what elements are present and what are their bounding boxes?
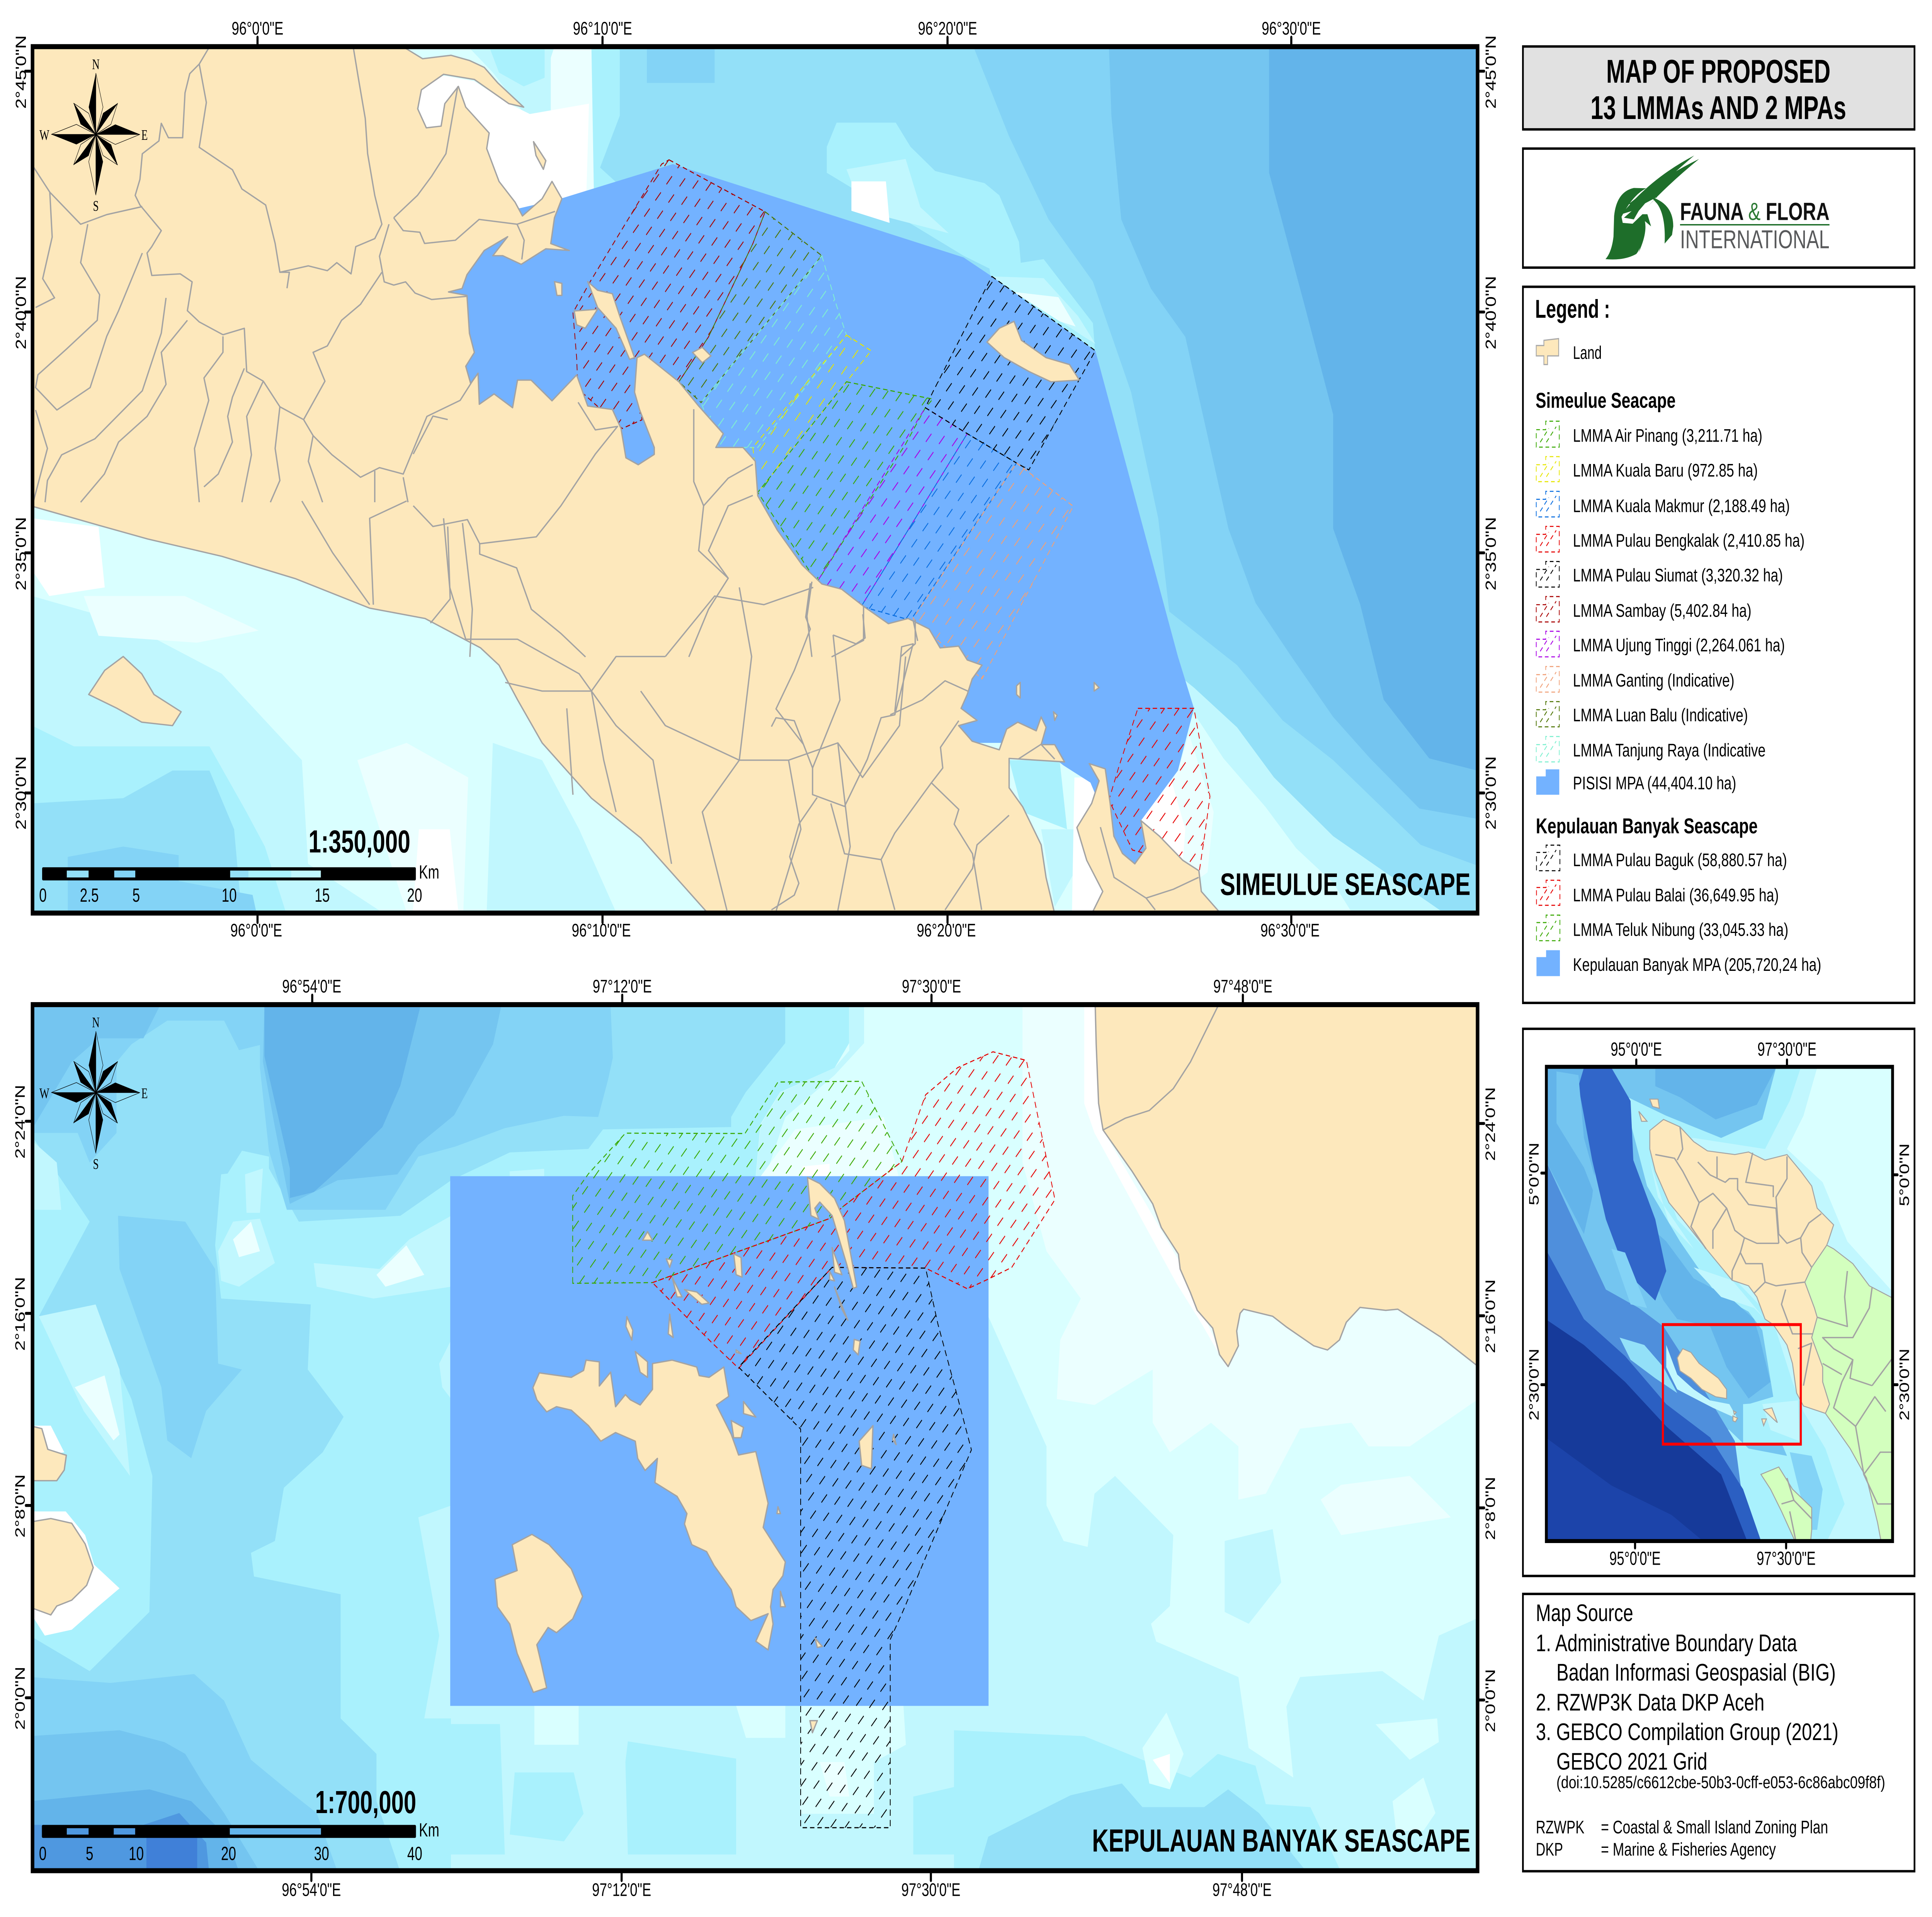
graticule ticks and labels: Kepulauan Banyak: 96°54'0"E: [282, 976, 341, 996]
LMMA Sambay: [573, 160, 765, 428]
land: Simeulue mainland: [32, 47, 1221, 914]
legend item: Ganting: LMMA Ganting (Indicative): [1573, 670, 1735, 690]
inset graticule labels: [1527, 1039, 1912, 1569]
legend item: Air Pinang: LMMA Air Pinang (3,211.71 ha): [1573, 425, 1762, 446]
scale bar: Kepulauan Banyak: 10: [129, 1843, 144, 1864]
graticule ticks and labels: Kepulauan Banyak: 2°8'0"N: [1483, 1477, 1498, 1540]
graticule ticks and labels: Simeulue: 96°30'0"E: [1262, 18, 1321, 39]
scale bar: Simeulue: [39, 862, 439, 906]
inset bathymetry and land: [1546, 1066, 1894, 1545]
legend item: Tanjung Raya: LMMA Tanjung Raya (Indicative: [1573, 740, 1765, 761]
source list: Map Source: [1536, 1599, 1633, 1626]
source list: 2. RZWP3K Data DKP Aceh: [1536, 1689, 1764, 1716]
legend item: Pulau Siumat: [1536, 561, 1783, 587]
abbreviations: RZWPK: [1536, 1817, 1584, 1837]
abbreviations: = Coastal & Small Island Zoning Plan: [1601, 1817, 1828, 1837]
LMMA Kuala Makmur: [861, 433, 1017, 620]
legend item: Kepulauan Banyak MPA: [1536, 950, 1821, 976]
scale bar: Simeulue: 5: [133, 885, 140, 906]
scale bar: Simeulue: 10: [222, 885, 237, 906]
bathymetry background: Kepulauan Banyak: [30, 1003, 1478, 1878]
LMMA Air Pinang: [758, 382, 933, 582]
legend item: Kuala Baru: [1536, 457, 1758, 482]
graticule ticks and labels: Simeulue: 2°45'0"N: [1483, 35, 1499, 109]
legend item: Pulau Baguk: [1536, 845, 1787, 871]
scale bar: Simeulue: 15: [315, 885, 330, 906]
legend subheading: Kepulauan Banyak Seascape: Kepulauan Banyak Seascape: [1536, 814, 1758, 838]
panel: Simeulue seascape map: [12, 18, 1499, 940]
logo wordmark: [1680, 197, 1830, 254]
panel: map source: [1523, 1594, 1915, 1871]
scale bar: Simeulue: 0: [39, 885, 47, 906]
inset graticule labels: 2°30'0"N: [1527, 1349, 1542, 1421]
inset extent: red rectangle: [1663, 1325, 1801, 1444]
scale bar: Kepulauan Banyak: 40: [407, 1843, 422, 1864]
legend item: Kepulauan Banyak MPA: Kepulauan Banyak MPA (205,720,24 ha): [1573, 955, 1821, 975]
graticule ticks and labels: Kepulauan Banyak: 97°30'0"E: [902, 976, 961, 996]
abbreviations: [1536, 1817, 1828, 1860]
inset graticule labels: 2°30'0"N: [1897, 1349, 1912, 1421]
land: Kepulauan Banyak islands and mainland: [30, 1003, 1478, 1733]
LMMA Kuala Baru: [753, 335, 871, 492]
scale bar: Kepulauan Banyak: 5: [86, 1843, 94, 1864]
legend heading: Legend :: [1535, 295, 1610, 323]
panel: legend: [1523, 287, 1915, 1003]
icon: Fauna and Flora oryx leaf logo: [1605, 155, 1699, 260]
graticule ticks and labels: Simeulue: 96°0'0"E: [230, 920, 282, 940]
LMMA Tanjung Raya: [701, 256, 847, 447]
graticule ticks and labels: Simeulue: 2°30'0"N: [1483, 756, 1499, 830]
compass rose: Kepulauan Banyak: [39, 1015, 148, 1173]
source list: (doi:10.5285/c6612cbe-50b3-0cff-e053-6c86abc09f8f): [1556, 1773, 1885, 1792]
inset graticule labels: 95°0'0"E: [1611, 1039, 1662, 1060]
source list: 1. Administrative Boundary Data: [1536, 1629, 1797, 1657]
graticule ticks and labels: Kepulauan Banyak: 97°48'0"E: [1213, 1880, 1272, 1900]
legend item: Pulau Bengkalak: LMMA Pulau Bengkalak (2,410.85 ha): [1573, 530, 1804, 551]
legend item: Luan Balu: [1536, 702, 1748, 727]
legend item: Teluk Nibung: LMMA Teluk Nibung (33,045.33 ha): [1573, 919, 1788, 940]
scale bar: Simeulue: 20: [407, 885, 422, 906]
graticule ticks and labels: Kepulauan Banyak: 2°0'0"N: [13, 1667, 28, 1730]
scale ratio: Simeulue: 1:350,000: [308, 824, 410, 860]
graticule ticks and labels: Kepulauan Banyak: 2°24'0"N: [1483, 1087, 1498, 1161]
Kepulauan Banyak MPA rectangle: [450, 1176, 988, 1706]
graticule ticks and labels: Simeulue: 96°0'0"E: [231, 18, 283, 39]
legend item: Kuala Baru: LMMA Kuala Baru (972.85 ha): [1573, 460, 1758, 481]
LMMA Ujung Tinggi: [817, 408, 967, 607]
graticule ticks and labels: Kepulauan Banyak: 96°54'0"E: [282, 1880, 341, 1900]
LMMA hatched areas: Kepulauan Banyak: [573, 1052, 1055, 1828]
panel: inset location map: [1523, 1029, 1915, 1576]
LMMA Pulau Baguk: [738, 1268, 971, 1828]
graticule ticks and labels: Simeulue: 2°40'0"N: [12, 276, 29, 350]
source list: [1536, 1599, 1885, 1792]
legend item: land: Land: [1573, 343, 1602, 363]
graticule ticks and labels: Simeulue: 96°10'0"E: [572, 920, 631, 940]
inset graticule labels: 97°30'0"E: [1757, 1548, 1816, 1569]
land: Aceh: [1639, 1099, 1833, 1426]
seascape name: Simeulue: SIMEULUE SEASCAPE: [1220, 867, 1470, 902]
scale bar: Simeulue: 2.5: [80, 885, 99, 906]
graticule ticks and labels: Kepulauan Banyak: 2°16'0"N: [13, 1277, 28, 1351]
legend item: Pulau Baguk: LMMA Pulau Baguk (58,880.57 ha): [1573, 850, 1787, 870]
abbreviations: = Marine & Fisheries Agency: [1601, 1839, 1776, 1860]
graticule ticks and labels: Kepulauan Banyak: 2°24'0"N: [13, 1085, 28, 1159]
legend item: Pisisi MPA: PISISI MPA (44,404.10 ha): [1573, 773, 1736, 793]
LMMA Luan Balu: [679, 212, 822, 403]
logo wordmark: FAUNA & FLORA: [1680, 197, 1830, 226]
panel: logo: [1523, 149, 1915, 268]
frame: Simeulue map: [32, 47, 1478, 913]
scale bar: Kepulauan Banyak: Km: [419, 1820, 439, 1841]
source list: Badan Informasi Geospasial (BIG): [1556, 1659, 1836, 1686]
legend item: Ganting: [1536, 666, 1735, 692]
LMMA Ganting: [913, 463, 1073, 679]
land: North Sumatra and Nias (green): [1761, 1245, 1894, 1545]
legend subheading: Simeulue Seacape: Simeulue Seacape: [1536, 389, 1675, 413]
graticule ticks and labels: Simeulue: 96°20'0"E: [917, 920, 976, 940]
LMMA hatched areas: Simeulue: [573, 160, 1210, 874]
legend item: Pulau Balai: LMMA Pulau Balai (36,649.95 ha): [1573, 885, 1779, 905]
graticule ticks and labels: Simeulue: 2°45'0"N: [12, 35, 29, 109]
source list: 3. GEBCO Compilation Group (2021): [1536, 1718, 1838, 1745]
scale bar: Kepulauan Banyak: 30: [314, 1843, 329, 1864]
legend item: Air Pinang: [1536, 421, 1762, 447]
Pisisi MPA polygon: [450, 164, 1194, 872]
graticule ticks and labels: Simeulue: [12, 18, 1499, 940]
graticule ticks and labels: Simeulue: 2°35'0"N: [1483, 517, 1499, 590]
legend item: Pulau Siumat: LMMA Pulau Siumat (3,320.32 ha): [1573, 565, 1783, 586]
LMMA Pulau Balai: [652, 1052, 1055, 1368]
graticule ticks and labels: Simeulue: 96°20'0"E: [918, 18, 977, 39]
graticule ticks and labels: Simeulue: 2°30'0"N: [12, 756, 29, 830]
frame: Kepulauan Banyak map: [32, 1004, 1478, 1871]
graticule ticks and labels: Simeulue: 96°30'0"E: [1260, 920, 1320, 940]
legend item: Teluk Nibung: [1536, 915, 1788, 941]
graticule ticks and labels: Kepulauan Banyak: 2°16'0"N: [1483, 1279, 1498, 1353]
legend item: Ujung Tinggi: [1536, 631, 1785, 657]
graticule ticks and labels: Simeulue: 2°35'0"N: [12, 517, 29, 590]
graticule ticks and labels: Kepulauan Banyak: 2°0'0"N: [1483, 1669, 1498, 1732]
scale ratio: Kepulauan Banyak: 1:700,000: [315, 1784, 416, 1820]
graticule ticks and labels: Simeulue: 96°10'0"E: [573, 18, 632, 39]
logo wordmark: INTERNATIONAL: [1680, 225, 1830, 254]
admin boundaries: Simeulue: [33, 48, 1199, 911]
inset graticule labels: 5°0'0"N: [1897, 1143, 1912, 1206]
admin boundary: Kepulauan Banyak mainland: [1103, 1003, 1219, 1130]
panel: Kepulauan Banyak seascape map: [13, 976, 1498, 1900]
graticule ticks and labels: Kepulauan Banyak: 97°30'0"E: [901, 1880, 961, 1900]
graticule ticks and labels: Simeulue: 2°40'0"N: [1483, 276, 1499, 350]
scale bar: Kepulauan Banyak: 20: [221, 1843, 236, 1864]
legend item: Pisisi MPA: [1536, 769, 1736, 795]
inset graticule labels: 95°0'0"E: [1609, 1548, 1661, 1569]
inset graticule labels: 97°30'0"E: [1757, 1039, 1816, 1060]
graticule ticks and labels: Kepulauan Banyak: [13, 976, 1498, 1900]
scale bar: Kepulauan Banyak: [39, 1820, 439, 1864]
scale bar: Simeulue: Km: [419, 862, 439, 883]
graticule ticks and labels: Kepulauan Banyak: 2°8'0"N: [13, 1474, 28, 1538]
legend item: Kuala Makmur: [1536, 491, 1790, 517]
source list: GEBCO 2021 Grid: [1556, 1748, 1708, 1775]
legend item: Luan Balu: LMMA Luan Balu (Indicative): [1573, 705, 1748, 725]
scale bar: Kepulauan Banyak: 0: [39, 1843, 46, 1864]
LMMA Pulau Bengkalak: [1109, 708, 1210, 874]
legend item: land: [1536, 338, 1602, 365]
graticule ticks and labels: Kepulauan Banyak: 97°12'0"E: [592, 1880, 651, 1900]
legend item: Kuala Makmur: LMMA Kuala Makmur (2,188.49 ha): [1573, 496, 1790, 516]
LMMA Pulau Siumat: [925, 277, 1095, 470]
panel: title: 13 LMMAs AND 2 MPAs: [1590, 89, 1846, 126]
compass rose: Simeulue: [39, 57, 148, 214]
panel: title: MAP OF PROPOSED: [1606, 53, 1830, 90]
legend item: Sambay: [1536, 597, 1752, 622]
legend item: Ujung Tinggi: LMMA Ujung Tinggi (2,264.061 ha): [1573, 635, 1785, 655]
legend item: Pulau Bengkalak: [1536, 527, 1804, 552]
LMMA Teluk Nibung: [573, 1081, 902, 1283]
seascape name: Kepulauan Banyak: KEPULAUAN BANYAK SEASCAPE: [1092, 1823, 1470, 1859]
legend item: Pulau Balai: [1536, 880, 1779, 905]
inset graticule labels: 5°0'0"N: [1527, 1142, 1542, 1205]
panel: title: [1523, 46, 1915, 129]
bathymetry background: Simeulue: [32, 47, 1477, 914]
graticule ticks and labels: Kepulauan Banyak: 97°12'0"E: [593, 976, 652, 996]
abbreviations: DKP: [1536, 1839, 1563, 1860]
graticule ticks and labels: Kepulauan Banyak: 97°48'0"E: [1213, 976, 1272, 996]
inset frame: [1546, 1067, 1893, 1541]
legend item: Sambay: LMMA Sambay (5,402.84 ha): [1573, 600, 1752, 621]
legend item: Tanjung Raya: [1536, 736, 1765, 762]
